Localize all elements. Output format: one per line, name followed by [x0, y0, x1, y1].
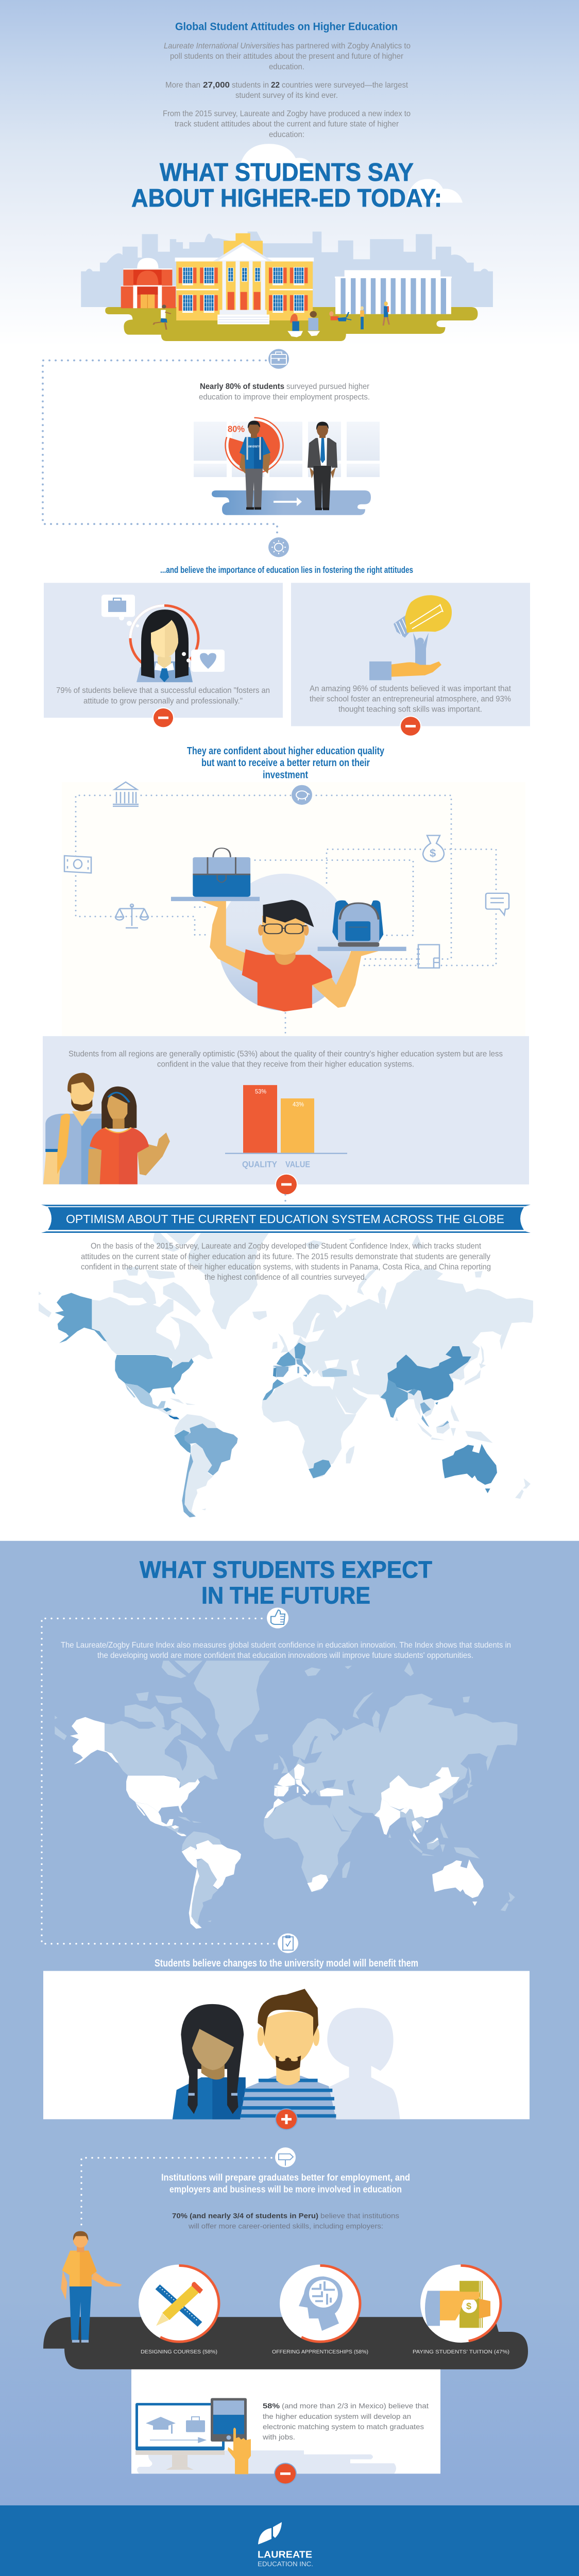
- intro text block: students in: [232, 81, 269, 90]
- glasses: [262, 924, 306, 934]
- skill: paying tuition: $: [466, 2301, 471, 2311]
- temple building: [335, 270, 452, 314]
- hand: [391, 662, 441, 677]
- yellow main building: [175, 233, 314, 324]
- subheading: quality vs return: investment: [263, 769, 308, 781]
- employer person: [61, 2231, 122, 2343]
- intro text block: More than: [165, 81, 200, 90]
- skill: paying tuition: [413, 2265, 509, 2355]
- panel: quality vs value: Students from all regions are generally optimistic (53%) about the quality of their country's higher education system but are less: [69, 1050, 503, 1058]
- bar chart: VALUE: [285, 1160, 310, 1169]
- icon: money bag: $: [430, 846, 436, 859]
- subheading: institutions: [161, 2172, 410, 2194]
- text: future index: the developing world are more confident that education innovations will improve future students' opportunities.: [97, 1651, 473, 1660]
- briefcase: [193, 848, 250, 897]
- subheading: university model: Students believe changes to the university model will benefit them: [155, 1957, 418, 1969]
- text: confidence index: confident in the current state of their higher education systems, with students in Panama, Costa Rica, and China reporting: [81, 1263, 491, 1272]
- woman: [88, 1087, 170, 1184]
- pie chart 80%: [226, 418, 283, 473]
- text: 70 percent: believe that institutions: [320, 2212, 399, 2219]
- icon: notebook: [417, 945, 439, 968]
- tablet: [211, 2398, 247, 2442]
- bar chart: QUALITY: [242, 1160, 277, 1169]
- text: future index: [61, 1641, 511, 1660]
- collapse button: matching: [274, 2463, 297, 2484]
- dotted connector: employment: [43, 360, 277, 533]
- dotted connector: future: [42, 1618, 277, 1944]
- subheading: institutions: employers and business will be more involved in education: [169, 2184, 402, 2194]
- bar chart: 43%: [293, 1101, 304, 1108]
- text: confidence index: the highest confidence of all countries surveyed.: [205, 1273, 367, 1282]
- text: 58%: [263, 2402, 280, 2410]
- banner: optimism: [41, 1205, 531, 1233]
- student figure: UNIVERSITY: [248, 445, 260, 448]
- collapse button: right panel: [400, 716, 421, 737]
- intro text block: education.: [269, 63, 304, 71]
- icon: woman with ring: [130, 605, 198, 682]
- heading: future: [140, 1556, 432, 1608]
- intro text block: [163, 42, 411, 139]
- floor: [212, 490, 371, 515]
- page background: sky gradient: [0, 0, 579, 346]
- main heading: WHAT STUDENTS SAY: [160, 158, 414, 187]
- text: 79% of students believe that a successful education "fosters an: [56, 687, 270, 695]
- student figure: [240, 421, 270, 510]
- left arm: [201, 901, 247, 971]
- skill: offering apprenticeships: [272, 2265, 368, 2355]
- bubble: briefcase: [101, 595, 139, 628]
- window panels: [194, 421, 380, 477]
- subheading: attitudes: ...and believe the importance of education lies in fostering the right attitudes: [160, 565, 413, 575]
- panel: quality vs value: [43, 1036, 529, 1184]
- icon: signpost: [275, 2147, 296, 2167]
- icon: thumbs up: [267, 1607, 288, 1629]
- dotted connector: institutions: [81, 2158, 271, 2228]
- map: future index: [55, 1660, 517, 1929]
- intro text block: From the 2015 survey, Laureate and Zogby have produced a new index to: [163, 110, 411, 118]
- right tray: [318, 947, 406, 951]
- hand: [228, 2428, 251, 2474]
- dotted network connectors: [76, 795, 496, 1036]
- main heading: [131, 158, 442, 212]
- text: 80 percent: education to improve their employment prospects.: [199, 393, 370, 401]
- clouds: [238, 144, 463, 202]
- heading: future: IN THE FUTURE: [201, 1582, 370, 1608]
- man with beard: [240, 1989, 336, 2120]
- intro text block: poll students on their attitudes about the present and future of higher: [170, 52, 403, 61]
- left tray: [171, 897, 260, 901]
- icon: money bag: [423, 836, 444, 861]
- right arm: [312, 951, 379, 1008]
- heading: future: WHAT STUDENTS EXPECT: [140, 1556, 432, 1583]
- text: 70 percent: will offer more career-oriented skills, including employers:: [188, 2223, 383, 2230]
- expand button: students: [275, 2108, 298, 2130]
- section background: future: [0, 1541, 579, 2505]
- figure: [413, 633, 429, 668]
- intro text block: 27,000: [203, 81, 230, 90]
- employer track: [43, 2317, 528, 2369]
- subheading: quality vs return: but want to receive a better return on their: [201, 757, 370, 769]
- campus illustration: [81, 232, 493, 341]
- panel: 79 percent: [44, 583, 283, 718]
- circle backdrop: [218, 874, 351, 1011]
- intro title: Global Student Attitudes on Higher Education: [175, 20, 398, 32]
- computer: [135, 2403, 225, 2470]
- text: 80 percent: surveyed pursued higher: [286, 382, 369, 391]
- collapse button: quality panel: [275, 1174, 298, 1195]
- text: the higher education system will develop an: [263, 2413, 411, 2420]
- icon: scales: [115, 904, 148, 928]
- text: (and more than 2/3 in Mexico) believe that: [282, 2402, 429, 2410]
- text: 80 percent: [199, 382, 370, 401]
- logo wordmark: LAUREATE: [258, 2549, 312, 2560]
- bar chart: 53%: [255, 1089, 267, 1095]
- icon: bank: [113, 782, 139, 806]
- neck and face: [274, 947, 296, 965]
- icon: piggy bank: [292, 785, 312, 805]
- text: An amazing 96% of students believed it was important that: [310, 685, 512, 693]
- silhouette: [327, 2008, 400, 2120]
- cream backdrop: [62, 782, 525, 1036]
- icon: speech bubble: [486, 893, 509, 915]
- icon: sun: [268, 537, 289, 557]
- pie chart 80%: 80%: [228, 424, 245, 434]
- panel: quality vs value: confident in the value that they receive from their higher education systems.: [157, 1060, 414, 1069]
- intro text block: student survey of its kind ever.: [235, 91, 338, 100]
- arrow: [274, 497, 302, 506]
- text: 70 percent: [172, 2212, 399, 2230]
- icon: cash: [64, 856, 91, 873]
- bubble: heart: [182, 650, 225, 672]
- subheading: quality vs return: They are confident about higher education quality: [187, 745, 384, 757]
- text: confidence index: [81, 1242, 491, 1282]
- text: future index: The Laureate/Zogby Future Index also measures global student confidence in education innovation. The Index shows that students in: [61, 1641, 511, 1650]
- main heading: ABOUT HIGHER-ED TODAY:: [131, 184, 442, 212]
- students on lawn: [154, 301, 389, 337]
- skill: designing courses: DESIGNING COURSES (58%): [141, 2349, 217, 2355]
- banner: optimism: OPTIMISM ABOUT THE CURRENT EDUCATION SYSTEM ACROSS THE GLOBE: [66, 1212, 504, 1226]
- text: 80 percent: Nearly 80% of students: [200, 382, 284, 391]
- footer: EDUCATION INC.: [258, 2560, 313, 2568]
- panel: 96 percent: their school foster an entrepreneurial atmosphere, and 93%: [310, 695, 511, 703]
- text: electronic matching system to match graduates: [263, 2423, 424, 2431]
- icon: lightbulb: [369, 595, 452, 680]
- subheading: institutions: Institutions will prepare graduates better for employment, and: [161, 2172, 410, 2182]
- city skyline: [81, 232, 493, 307]
- skill: paying tuition: PAYING STUDENTS' TUITION (47%): [413, 2349, 509, 2355]
- icon: briefcase: [268, 349, 289, 369]
- backpack: [332, 900, 383, 947]
- intro text block: Laureate International Universities: [164, 42, 280, 50]
- skill: offering apprenticeships: OFFERING APPRENTICESHIPS (58%): [272, 2349, 368, 2355]
- text: confidence index: On the basis of the 2015 survey, Laureate and Zogby developed the Student Confidence Index, which tracks student: [91, 1242, 482, 1251]
- bar chart: [225, 1085, 347, 1169]
- text: [262, 2402, 429, 2441]
- professional figure: [308, 421, 337, 510]
- panel: students: [43, 1971, 530, 2120]
- text: confidence index: attitudes on the current state of higher education and its future. The 2015 results demonstrate that students are generally: [81, 1252, 490, 1261]
- skill: designing courses: [139, 2265, 220, 2355]
- map: current optimism: [39, 1233, 533, 1517]
- text: with jobs.: [262, 2433, 295, 2441]
- panel: matching system: [131, 2369, 440, 2474]
- illustration: student becomes professional: [194, 418, 380, 515]
- subheading: quality vs return: [187, 745, 384, 781]
- lawn: [105, 307, 478, 341]
- intro text block: has partnered with Zogby Analytics to: [281, 42, 411, 50]
- hair: [263, 900, 314, 927]
- collapse button: left panel: [152, 707, 174, 728]
- red building: [121, 258, 176, 308]
- floor: [137, 2450, 396, 2473]
- intro text block: track student attitudes about the current and future state of higher: [175, 120, 399, 129]
- illustration: student weighing quality and value: [171, 848, 406, 1011]
- text: 70 percent: 70% (and nearly 3/4 of students in Peru): [172, 2212, 318, 2219]
- icon: clipboard: [278, 1934, 298, 1953]
- shirt: [242, 950, 332, 1011]
- panel: 96 percent: thought teaching soft skills was important.: [338, 705, 482, 714]
- man: [43, 1073, 101, 1184]
- intro text block: education:: [269, 130, 304, 139]
- woman with braids: [173, 2004, 246, 2120]
- logo leaf: [258, 2522, 282, 2545]
- footer: [0, 2505, 579, 2576]
- intro text block: countries were surveyed—the largest: [282, 81, 408, 90]
- couple illustration: [43, 1073, 170, 1184]
- panel: 96 percent: [291, 583, 530, 726]
- intro text block: 22: [271, 81, 280, 90]
- panel: 79 percent: attitude to grow personally and professionally.": [83, 697, 243, 705]
- connector dots: [284, 1195, 286, 1201]
